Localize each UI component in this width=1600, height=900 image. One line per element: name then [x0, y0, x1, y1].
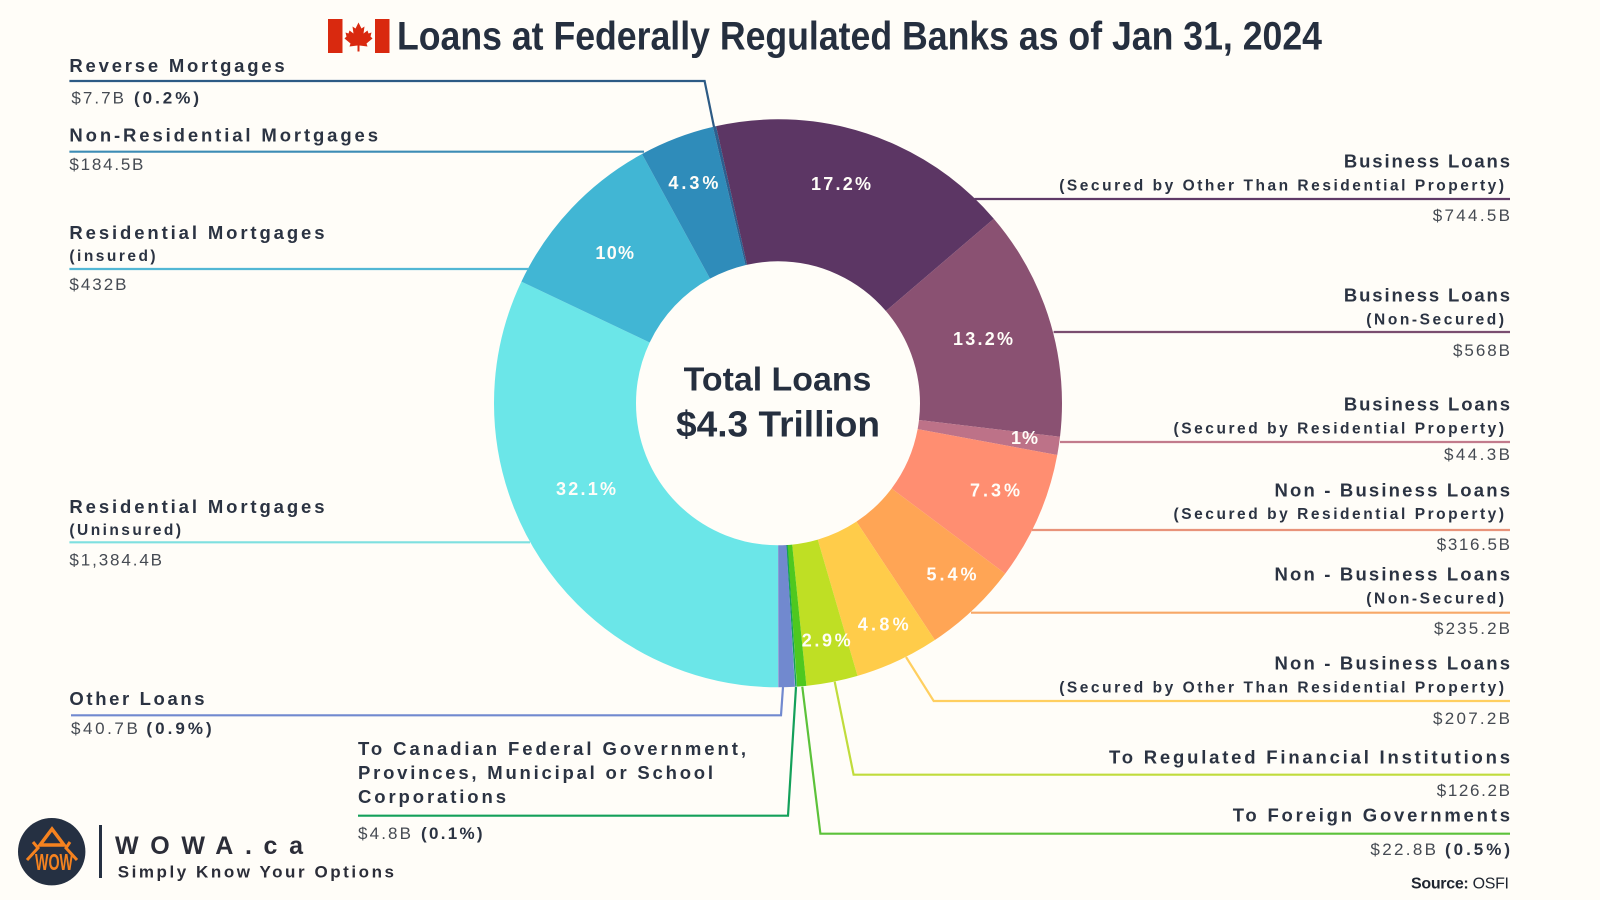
callout: non-business loans non-secured: $235.2B — [1434, 619, 1510, 638]
callout: regulated financial institutions: To Regulated Financial Institutions — [1109, 746, 1510, 767]
callout: non-residential mortgages: $184.5B — [69, 155, 143, 174]
centre total: $4.3 Trillion — [676, 404, 880, 445]
callout: non-business loans non-secured — [971, 564, 1510, 638]
percentage labels on slices: 1% — [1011, 428, 1038, 448]
percentage labels on slices: 17.2% — [811, 174, 871, 194]
callout: foreign governments: To Foreign Governments — [1233, 805, 1510, 826]
callout: reverse mortgages: $7.7B — [71, 88, 124, 107]
callout: business loans non-secured: $568B — [1453, 341, 1510, 360]
callout: business loans secured by residential: Business Loans — [1344, 394, 1510, 415]
callout: business loans non-secured: (Non-Secured) — [1366, 311, 1504, 328]
callout: non-business loans secured by residential: Non - Business Loans — [1274, 480, 1510, 501]
percentage labels on slices: 5.4% — [926, 565, 976, 585]
callout: business loans secured by other: Business Loans — [1344, 151, 1510, 172]
callout: business loans non-secured — [1054, 285, 1510, 360]
source note: Source: OSFI — [1411, 875, 1509, 892]
callout: foreign governments: (0.5%) — [1445, 840, 1510, 859]
callout: regulated financial institutions — [835, 682, 1510, 800]
callout: non-residential mortgages — [69, 124, 644, 174]
callout: business loans secured by residential — [1060, 394, 1510, 464]
centre total — [676, 361, 880, 445]
callout: residential mortgages uninsured — [69, 496, 530, 570]
percentage labels on slices: 4.8% — [858, 615, 909, 635]
callout: government — [358, 687, 796, 843]
callout: business loans secured by other: $744.5B — [1433, 206, 1510, 225]
callout: reverse mortgages: (0.2%) — [134, 88, 199, 107]
percentage labels on slices: 13.2% — [953, 329, 1013, 349]
callout: business loans secured by other — [974, 151, 1510, 225]
percentage labels on slices: 4.3% — [668, 173, 718, 193]
icon: WOWA house badge: WOW — [35, 849, 73, 875]
callout: non-business loans secured by residential: $316.5B — [1437, 535, 1510, 554]
callout: non-business loans secured by other — [906, 652, 1510, 728]
callout: residential mortgages uninsured: Residential Mortgages — [69, 496, 325, 517]
callout: non-business loans secured by residential — [1032, 480, 1510, 554]
percentage labels on slices: 7.3% — [970, 481, 1020, 501]
callout: government: (0.1%) — [421, 824, 483, 843]
callout: non-business loans non-secured: Non - Business Loans — [1274, 564, 1510, 585]
callout: residential mortgages insured — [69, 222, 528, 294]
donut chart — [565, 190, 991, 616]
icon: Canadian flag — [328, 19, 390, 53]
percentage labels on slices: 2.9% — [802, 631, 851, 651]
callout: reverse mortgages: Reverse Mortgages — [69, 55, 285, 76]
callout: residential mortgages insured: (insured) — [69, 248, 156, 265]
callout: government: Provinces, Municipal or School — [358, 762, 713, 783]
callout: non-business loans secured by other: Non - Business Loans — [1274, 652, 1510, 673]
callout: foreign governments: $22.8B — [1370, 840, 1436, 859]
logo: WOWA.ca: WOWA.ca — [115, 832, 304, 860]
callout: residential mortgages insured: $432B — [69, 275, 126, 294]
callout: non-business loans non-secured: (Non-Secured) — [1366, 590, 1504, 607]
callout: other loans: $40.7B — [71, 719, 138, 738]
callout: reverse mortgages — [69, 55, 714, 127]
title with Canadian flag — [328, 14, 1323, 58]
callout: business loans secured by other: (Secured by Other Than Residential Property) — [1059, 177, 1504, 194]
callout: other loans: Other Loans — [69, 688, 205, 709]
callout: government: Corporations — [358, 786, 506, 807]
callout: government: To Canadian Federal Government, — [358, 738, 746, 759]
callout: non-business loans secured by residential: (Secured by Residential Property) — [1174, 506, 1504, 523]
callout: non-business loans secured by other: (Secured by Other Than Residential Property) — [1059, 679, 1504, 696]
callout: foreign governments — [802, 687, 1510, 859]
percentage labels on slices: 10% — [595, 243, 634, 263]
callout: regulated financial institutions: $126.2B — [1437, 781, 1510, 800]
logo: WOWA.ca — [18, 818, 394, 885]
callout: residential mortgages insured: Residential Mortgages — [69, 222, 325, 243]
callout: other loans — [69, 687, 783, 738]
callout: non-business loans secured by other: $207.2B — [1433, 709, 1510, 728]
callout: business loans secured by residential: $44.3B — [1444, 445, 1510, 464]
callout: residential mortgages uninsured: $1,384.4B — [69, 551, 162, 570]
icon: WOWA house badge — [18, 818, 85, 885]
callout: residential mortgages uninsured: (Uninsured) — [69, 522, 181, 539]
callout: non-residential mortgages: Non-Residential Mortgages — [69, 124, 378, 145]
centre total: Total Loans — [684, 361, 871, 398]
callout: other loans: (0.9%) — [146, 719, 212, 738]
percentage labels on slices — [556, 173, 1038, 651]
callout: business loans secured by residential: (Secured by Residential Property) — [1174, 420, 1504, 437]
callout: government: $4.8B — [358, 824, 411, 843]
percentage labels on slices: 32.1% — [556, 479, 616, 499]
logo: WOWA.ca: Simply Know Your Options — [118, 862, 394, 881]
heading: Loans at Federally Regulated Banks as of Jan 31, 2024 — [397, 14, 1323, 58]
callout: business loans non-secured: Business Loans — [1344, 285, 1510, 306]
